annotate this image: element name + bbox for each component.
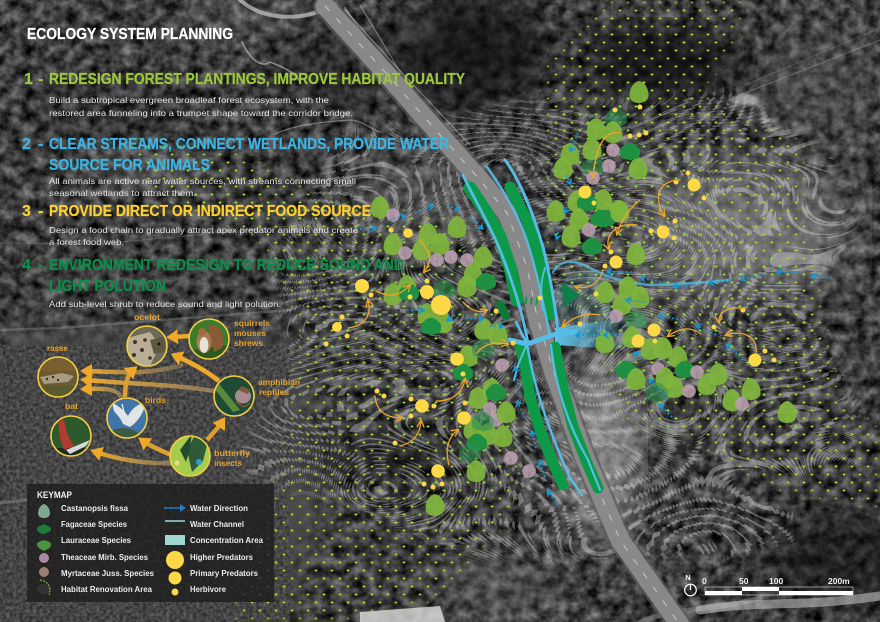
legend labels left: Myrtaceae Juss. Species: [61, 569, 155, 578]
food web labels: amphibian: [258, 377, 300, 387]
animal photo: amphibian: [214, 376, 254, 416]
food web labels: squirrels: [234, 318, 270, 328]
section 2: streams and wetlands: seasonal wetlands to attract them.: [49, 188, 196, 198]
scale bar: [702, 576, 853, 595]
section 3: food source: a forest food web.: [49, 237, 124, 247]
animal photo: bat: [51, 416, 91, 458]
legend labels left: [61, 504, 155, 594]
planted trees: [370, 81, 796, 519]
section 2: streams and wetlands: 2: [22, 136, 31, 153]
scale bar: 200m: [828, 576, 850, 586]
legend icons: water and animals: [164, 504, 186, 596]
section 4: sound and light: [22, 257, 404, 309]
food web labels: butterfly: [214, 448, 250, 458]
legend labels left: Habitat Renovation Area: [61, 585, 153, 594]
section 2: streams and wetlands: SOURCE FOR ANIMALS: [49, 157, 210, 174]
food web labels: bat: [65, 401, 78, 411]
highway corridor: [325, 6, 680, 622]
section 3: food source: 3: [22, 203, 31, 220]
water concentration area: [555, 271, 628, 350]
section 3: food source: Design a food chain to gradually attract apex predator animals and create: [49, 225, 358, 235]
food web labels: mouses: [234, 328, 266, 338]
legend labels right: Concentration Area: [190, 536, 264, 545]
section 4: sound and light: 4: [22, 257, 31, 274]
section 2: streams and wetlands: CLEAR STREAMS, CONNECT WETLANDS, PROVIDE WATER: [49, 136, 449, 153]
section 1: forest plantings: restored area funneling into a trumpet shape toward the corridor bridge.: [49, 108, 353, 118]
section 2: streams and wetlands: All animals are active near water sources, with streams connecting small: [49, 176, 356, 186]
scale bar: 50: [739, 576, 749, 586]
legend labels left: Fagaceae Species: [61, 520, 128, 529]
food web labels: insects: [214, 458, 242, 468]
scale bar: 0: [702, 576, 707, 586]
food web labels: shrews: [234, 338, 263, 348]
section 1: forest plantings: [24, 71, 465, 118]
legend labels right: [190, 504, 264, 594]
legend labels right: Higher Predators: [190, 553, 254, 562]
section 4: sound and light: ENVIRONMENT REDESIGN TO REDUCE SOUND AND: [49, 257, 404, 274]
legend labels right: Water Direction: [190, 504, 248, 513]
legend labels left: Castanopsis fissa: [61, 504, 129, 513]
section 2: streams and wetlands: [22, 136, 449, 198]
section 4: sound and light: LIGHT POLUTION: [49, 278, 166, 295]
legend labels left: Lauraceae Species: [61, 536, 132, 545]
food web labels: ocelot: [134, 312, 160, 322]
blue water-direction arrows: [360, 133, 832, 505]
animal photo: butterfly: [170, 434, 210, 476]
section 1: forest plantings: Build a subtropical evergreen broadleaf forest ecosystem, with the: [49, 95, 329, 105]
keymap legend: KEYMAP: [37, 490, 72, 500]
orange food-chain arrows: [348, 133, 756, 465]
animal photo: ocelot: [127, 326, 167, 366]
food web arrows: [86, 336, 222, 463]
contour lines: [230, 84, 867, 567]
section 3: food source: PROVIDE DIRECT OR INDIRECT FOOD SOURCE: [49, 203, 371, 220]
legend icons: species: [37, 504, 51, 595]
title: ECOLOGY SYSTEM PLANNING: [27, 26, 233, 43]
animal photo: squirrel: [189, 319, 229, 359]
green noise-barrier shrubs along road: [470, 187, 598, 488]
section 3: food source: -: [38, 203, 43, 220]
section 2: streams and wetlands: -: [38, 136, 43, 153]
food web labels: [47, 312, 300, 468]
section 4: sound and light: Add sub-level shrub to reduce sound and light polution.: [49, 299, 281, 309]
food web labels: rasse: [47, 343, 68, 353]
section 1: forest plantings: -: [38, 71, 43, 88]
food web diagram: [38, 312, 300, 476]
section 1: forest plantings: REDESIGN FOREST PLANTINGS, IMPROVE HABITAT QUALITY: [49, 71, 465, 88]
food web labels: birds: [145, 395, 166, 405]
predators and herbivores: [324, 104, 776, 490]
legend labels left: Theaceae Mirb. Species: [61, 553, 149, 562]
section 4: sound and light: -: [38, 257, 43, 274]
north arrow: N: [685, 573, 691, 582]
section 1: forest plantings: 1: [24, 71, 33, 88]
legend labels right: Herbivore: [190, 585, 227, 594]
animal photo: birds: [107, 398, 147, 438]
north arrow: [685, 573, 696, 596]
section 3: food source: [22, 203, 371, 247]
food web labels: reptiles: [259, 387, 289, 397]
streams and water channels: [463, 160, 730, 495]
animal photo: rasse: [38, 357, 78, 398]
legend labels right: Primary Predators: [190, 569, 259, 578]
scale bar: 100: [769, 576, 783, 586]
legend labels right: Water Channel: [190, 520, 244, 529]
lower-left fine-textured ground: [0, 330, 330, 622]
keymap legend: [27, 484, 274, 602]
